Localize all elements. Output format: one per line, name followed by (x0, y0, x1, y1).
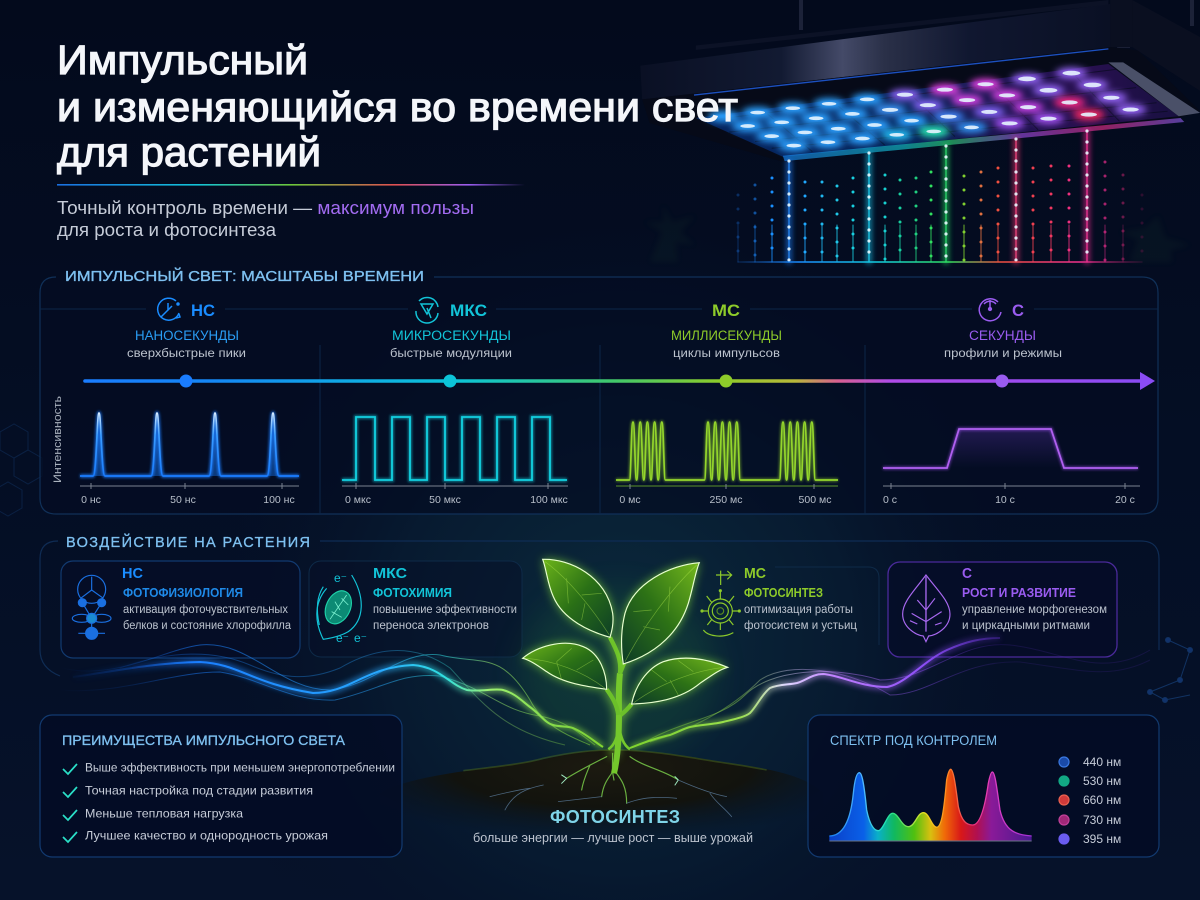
panel: benefits of pulsed light (40, 715, 402, 857)
column: microseconds (390, 297, 512, 360)
card: microseconds photochemistry: переноса электронов (373, 620, 489, 632)
card: nanoseconds photophysiology (61, 561, 300, 658)
leaf veins (525, 562, 725, 703)
lamp hanging rods (799, 0, 1194, 48)
chart: microsecond square wave: 0 мкс (345, 494, 371, 506)
icon: molecule tree (72, 575, 111, 639)
stem (607, 637, 632, 773)
icon: microsecond clock (416, 297, 438, 323)
main light beams core (789, 131, 1087, 262)
icon: leaf with electrons: e⁻ (336, 631, 349, 645)
spectrum legend (1059, 755, 1121, 846)
energy wave: green to purple, right (630, 638, 1150, 748)
central caption: больше энергии — лучше рост — выше урожай (473, 830, 753, 845)
heading: spectrum: СПЕКТР ПОД КОНТРОЛЕМ (830, 733, 997, 748)
column: nanoseconds: НС (191, 301, 215, 320)
light pulses falling from the lamp (738, 131, 1142, 262)
column: microseconds: МИКРОСЕКУНДЫ (392, 328, 511, 343)
subtitle: для роста и фотосинтеза (57, 220, 277, 240)
chart: microsecond square wave: 50 мкс (429, 494, 461, 506)
chart: seconds profile: 20 с (1115, 494, 1135, 506)
benefit list: Меньше тепловая нагрузка (85, 806, 243, 820)
heading: time scales: ИМПУЛЬСНЫЙ СВЕТ: МАСШТАБЫ ВРЕМЕНИ (65, 267, 424, 285)
subtitle (57, 198, 474, 240)
benefit list: Лучшее качество и однородность урожая (85, 828, 328, 842)
timeline arrow (85, 372, 1155, 390)
roots (490, 753, 732, 817)
icon: leaf with electrons: e⁻ (334, 571, 347, 585)
light rain fine stems (738, 225, 1123, 262)
icon: seconds dial (979, 299, 1001, 321)
column: milliseconds (671, 301, 782, 360)
card: nanoseconds photophysiology: ФОТОФИЗИОЛОГИЯ (123, 586, 243, 600)
card: milliseconds photosynthesis (701, 566, 879, 645)
card: microseconds photochemistry: повышение эффективности (373, 604, 517, 616)
title (57, 37, 738, 175)
heading: effects on plants: ВОЗДЕЙСТВИЕ НА РАСТЕНИЯ (66, 533, 310, 551)
axis label: intensity: Интенсивность (52, 396, 64, 483)
chart: nanosecond spikes (80, 413, 299, 506)
card: nanoseconds photophysiology: белков и состояние хлорофилла (123, 620, 292, 632)
spectrum legend: 730 нм (1083, 813, 1121, 827)
panel: spectrum under control (808, 715, 1159, 857)
column: seconds: СЕКУНДЫ (969, 328, 1036, 343)
light floor line (738, 261, 1142, 263)
benefit list: Точная настройка под стадии развития (85, 784, 313, 798)
column: milliseconds: циклы импульсов (673, 346, 780, 360)
icon: nanosecond clock (158, 298, 180, 320)
central caption: ФОТОСИНТЕЗ (550, 807, 680, 827)
chart: nanosecond spikes: 0 нс (81, 494, 101, 506)
molecular network decoration, right (1148, 638, 1192, 702)
chart: millisecond bursts: 500 мс (799, 494, 831, 506)
card: seconds growth and development: и циркадными ритмами (962, 620, 1090, 632)
card: milliseconds photosynthesis: ФОТОСИНТЕЗ (744, 586, 823, 600)
LED panel grid (705, 69, 1168, 152)
plant ground glow (518, 587, 718, 760)
soil mound (380, 750, 823, 867)
panel: effects on plants (40, 533, 1159, 676)
column: seconds: С (1012, 301, 1024, 320)
card: seconds growth and development: управление морфогенезом (962, 604, 1107, 616)
card: seconds growth and development: С (962, 566, 972, 582)
main light beam sparks (789, 131, 1087, 262)
panel: pulsed light time scales (40, 267, 1158, 514)
LED glow halos (708, 67, 1146, 151)
card: seconds growth and development (888, 562, 1117, 657)
chart: millisecond bursts: 250 мс (710, 494, 742, 506)
leaf glow (523, 559, 728, 704)
icon: leaf with electrons: e⁻ (354, 631, 367, 645)
chart: nanosecond spikes: 50 нс (170, 494, 196, 506)
chart: nanosecond spikes: 100 нс (263, 494, 295, 506)
icon: leaf with electrons (317, 571, 367, 645)
column: milliseconds: МИЛЛИСЕКУНДЫ (671, 328, 782, 343)
spectrum legend: 530 нм (1083, 774, 1121, 788)
chart: microsecond square wave: 100 мкс (530, 494, 568, 506)
spectrum legend: 440 нм (1083, 755, 1121, 769)
chart: seconds profile (883, 429, 1140, 506)
main light beams glow (789, 131, 1087, 262)
spectrum legend: 660 нм (1083, 793, 1121, 807)
energy wave: blue to green, left (40, 645, 603, 747)
decorative plant silhouettes behind the light rain (645, 205, 1190, 262)
LED grow lamp (640, 0, 1200, 162)
column: seconds (944, 299, 1062, 360)
title: и изменяющийся во времени свет (57, 84, 738, 130)
chart: millisecond bursts: 0 мс (619, 494, 641, 506)
leaves (523, 559, 728, 704)
card: seconds growth and development: РОСТ И РАЗВИТИЕ (962, 586, 1076, 600)
icon: photosystem sun (701, 571, 740, 636)
icon: purple leaf (903, 575, 950, 642)
column: nanoseconds: НАНОСЕКУНДЫ (135, 328, 239, 343)
title: Импульсный (57, 37, 308, 83)
chart: seconds profile: 10 с (995, 494, 1015, 506)
column: milliseconds: МС (712, 301, 740, 320)
central caption (473, 807, 753, 845)
benefit checkmarks (63, 764, 77, 842)
card: nanoseconds photophysiology: активация фоточувствительных (123, 604, 288, 616)
benefit list (85, 760, 395, 842)
card: microseconds photochemistry: МКС (373, 566, 408, 582)
chart: seconds profile: 0 с (883, 494, 897, 506)
chart: spectrum curve (829, 769, 1032, 841)
light rain dots (738, 162, 1142, 262)
column: microseconds: быстрые модуляции (390, 346, 512, 360)
heading: benefits: ПРЕИМУЩЕСТВА ИМПУЛЬСНОГО СВЕТА (62, 732, 346, 748)
card: nanoseconds photophysiology: НС (122, 566, 144, 582)
card: microseconds photochemistry (309, 561, 522, 657)
card: microseconds photochemistry: ФОТОХИМИЯ (373, 586, 452, 600)
column: nanoseconds: сверхбыстрые пики (127, 346, 246, 360)
card: milliseconds photosynthesis: оптимизация работы (744, 604, 853, 616)
chart: millisecond bursts (616, 422, 838, 506)
spectrum legend: 395 нм (1083, 832, 1121, 846)
subtitle: Точный контроль времени — максимум пользы (57, 198, 474, 218)
benefit list: Выше эффективность при меньшем энергопотреблении (85, 760, 395, 774)
LED bright cores (740, 71, 1139, 147)
column: nanoseconds (127, 298, 246, 360)
column: seconds: профили и режимы (944, 346, 1062, 360)
plant illustration (380, 559, 823, 867)
card: milliseconds photosynthesis: фотосистем и устьиц (744, 620, 857, 632)
chart: microsecond square wave (342, 417, 568, 506)
title: для растений (57, 129, 321, 175)
card: milliseconds photosynthesis: МС (744, 566, 767, 582)
molecular network decoration, left (0, 424, 42, 516)
column: microseconds: МКС (450, 301, 487, 320)
